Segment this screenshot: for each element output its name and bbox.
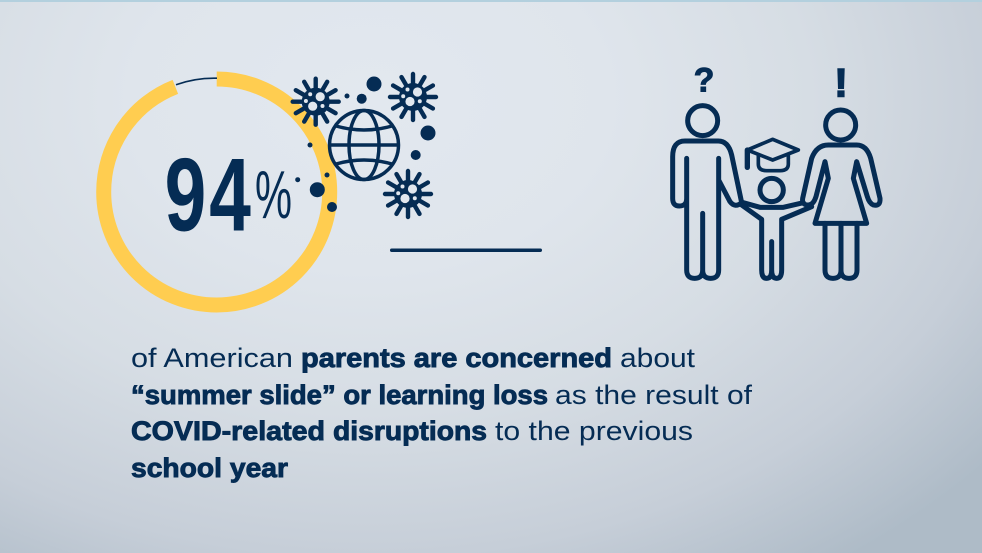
father [673, 106, 742, 278]
icon: globe with viruses [293, 74, 436, 217]
stat: 94%: % [255, 157, 292, 233]
icon: virus bottom [385, 171, 431, 217]
text block: description: as the result of [555, 380, 753, 410]
text block: description [131, 343, 753, 483]
donut chart: 94 percent [104, 78, 330, 305]
text block: description: “summer slide” or learning loss [131, 380, 548, 410]
particle dots [295, 76, 436, 212]
icon: virus top right [390, 74, 436, 120]
icon: virus top left [293, 79, 339, 125]
text block: description: about [620, 343, 696, 373]
text block: description: parents are concerned [301, 343, 612, 373]
graduation cap [747, 139, 798, 171]
stat: 94%: 94 [165, 138, 251, 253]
family figures [673, 106, 880, 278]
exclamation mark: ! [834, 62, 848, 106]
text block: description: school year [131, 453, 289, 483]
text block: description: disruptions [333, 416, 487, 446]
icon: family with graduation cap [673, 62, 880, 278]
icon: globe [330, 110, 398, 180]
divider line [390, 248, 542, 252]
stat: 94% [165, 138, 292, 253]
text block: description: COVID-related [131, 416, 325, 446]
mother [803, 110, 880, 278]
question mark: ? [694, 62, 714, 100]
child [742, 178, 812, 278]
text block: description: of American [131, 343, 293, 373]
text block: description: to the previous [495, 416, 693, 446]
